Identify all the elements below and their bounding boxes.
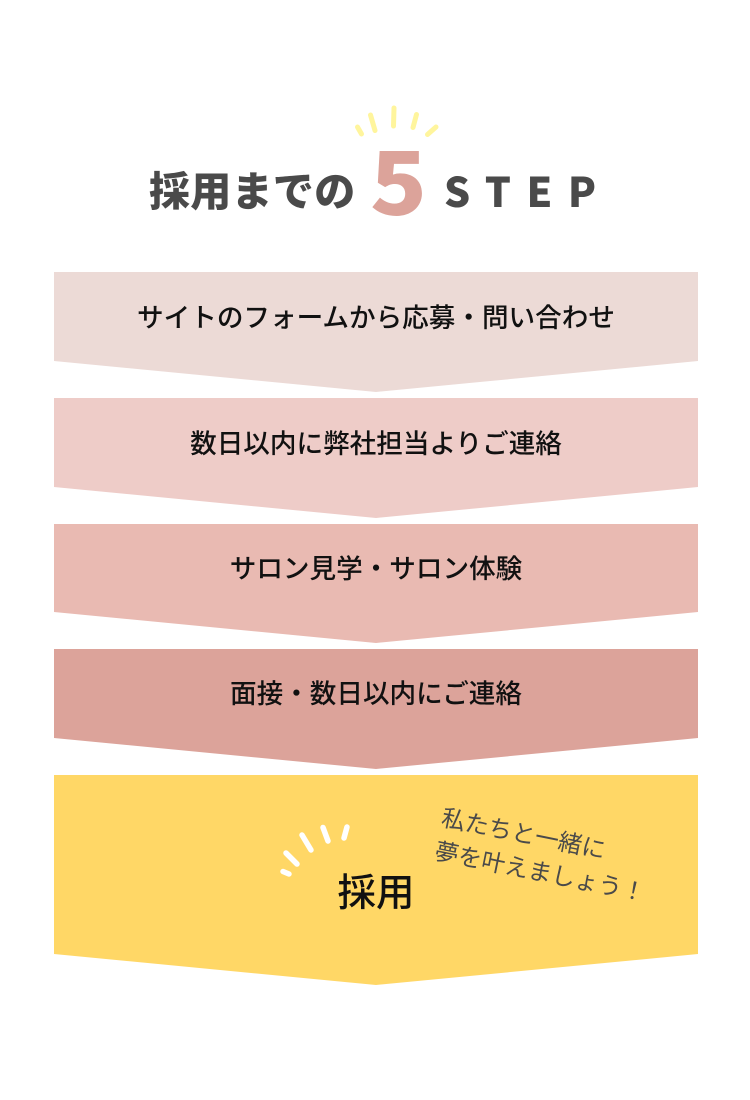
- callout message: 私たちと一緒に: [439, 805, 608, 864]
- step 1 text: サイトのフォームから応募・問い合わせ: [137, 303, 615, 333]
- icon: hired sparkle: [283, 827, 347, 874]
- step 3 text: サロン見学・サロン体験: [230, 554, 522, 584]
- title text: Japanese: 採用までの: [149, 158, 356, 218]
- panel: step 4 arrow: [54, 649, 698, 769]
- title: [149, 115, 612, 240]
- panel: step 5 hired arrow: [54, 775, 698, 985]
- callout message: [432, 805, 648, 907]
- step 5 text: 採用: [337, 872, 414, 915]
- title text: STEP: STEP: [444, 159, 612, 219]
- icon: title sparkle: [358, 108, 436, 134]
- title number 5: 5: [370, 115, 427, 240]
- callout message: 夢を叶えましょう！: [432, 838, 648, 907]
- panel: step 1 arrow: [54, 272, 698, 392]
- step 2 text: 数日以内に弊社担当よりご連絡: [190, 429, 562, 459]
- panel: step 3 arrow: [54, 524, 698, 643]
- step 4 text: 面接・数日以内にご連絡: [230, 679, 522, 709]
- panel: step 2 arrow: [54, 398, 698, 518]
